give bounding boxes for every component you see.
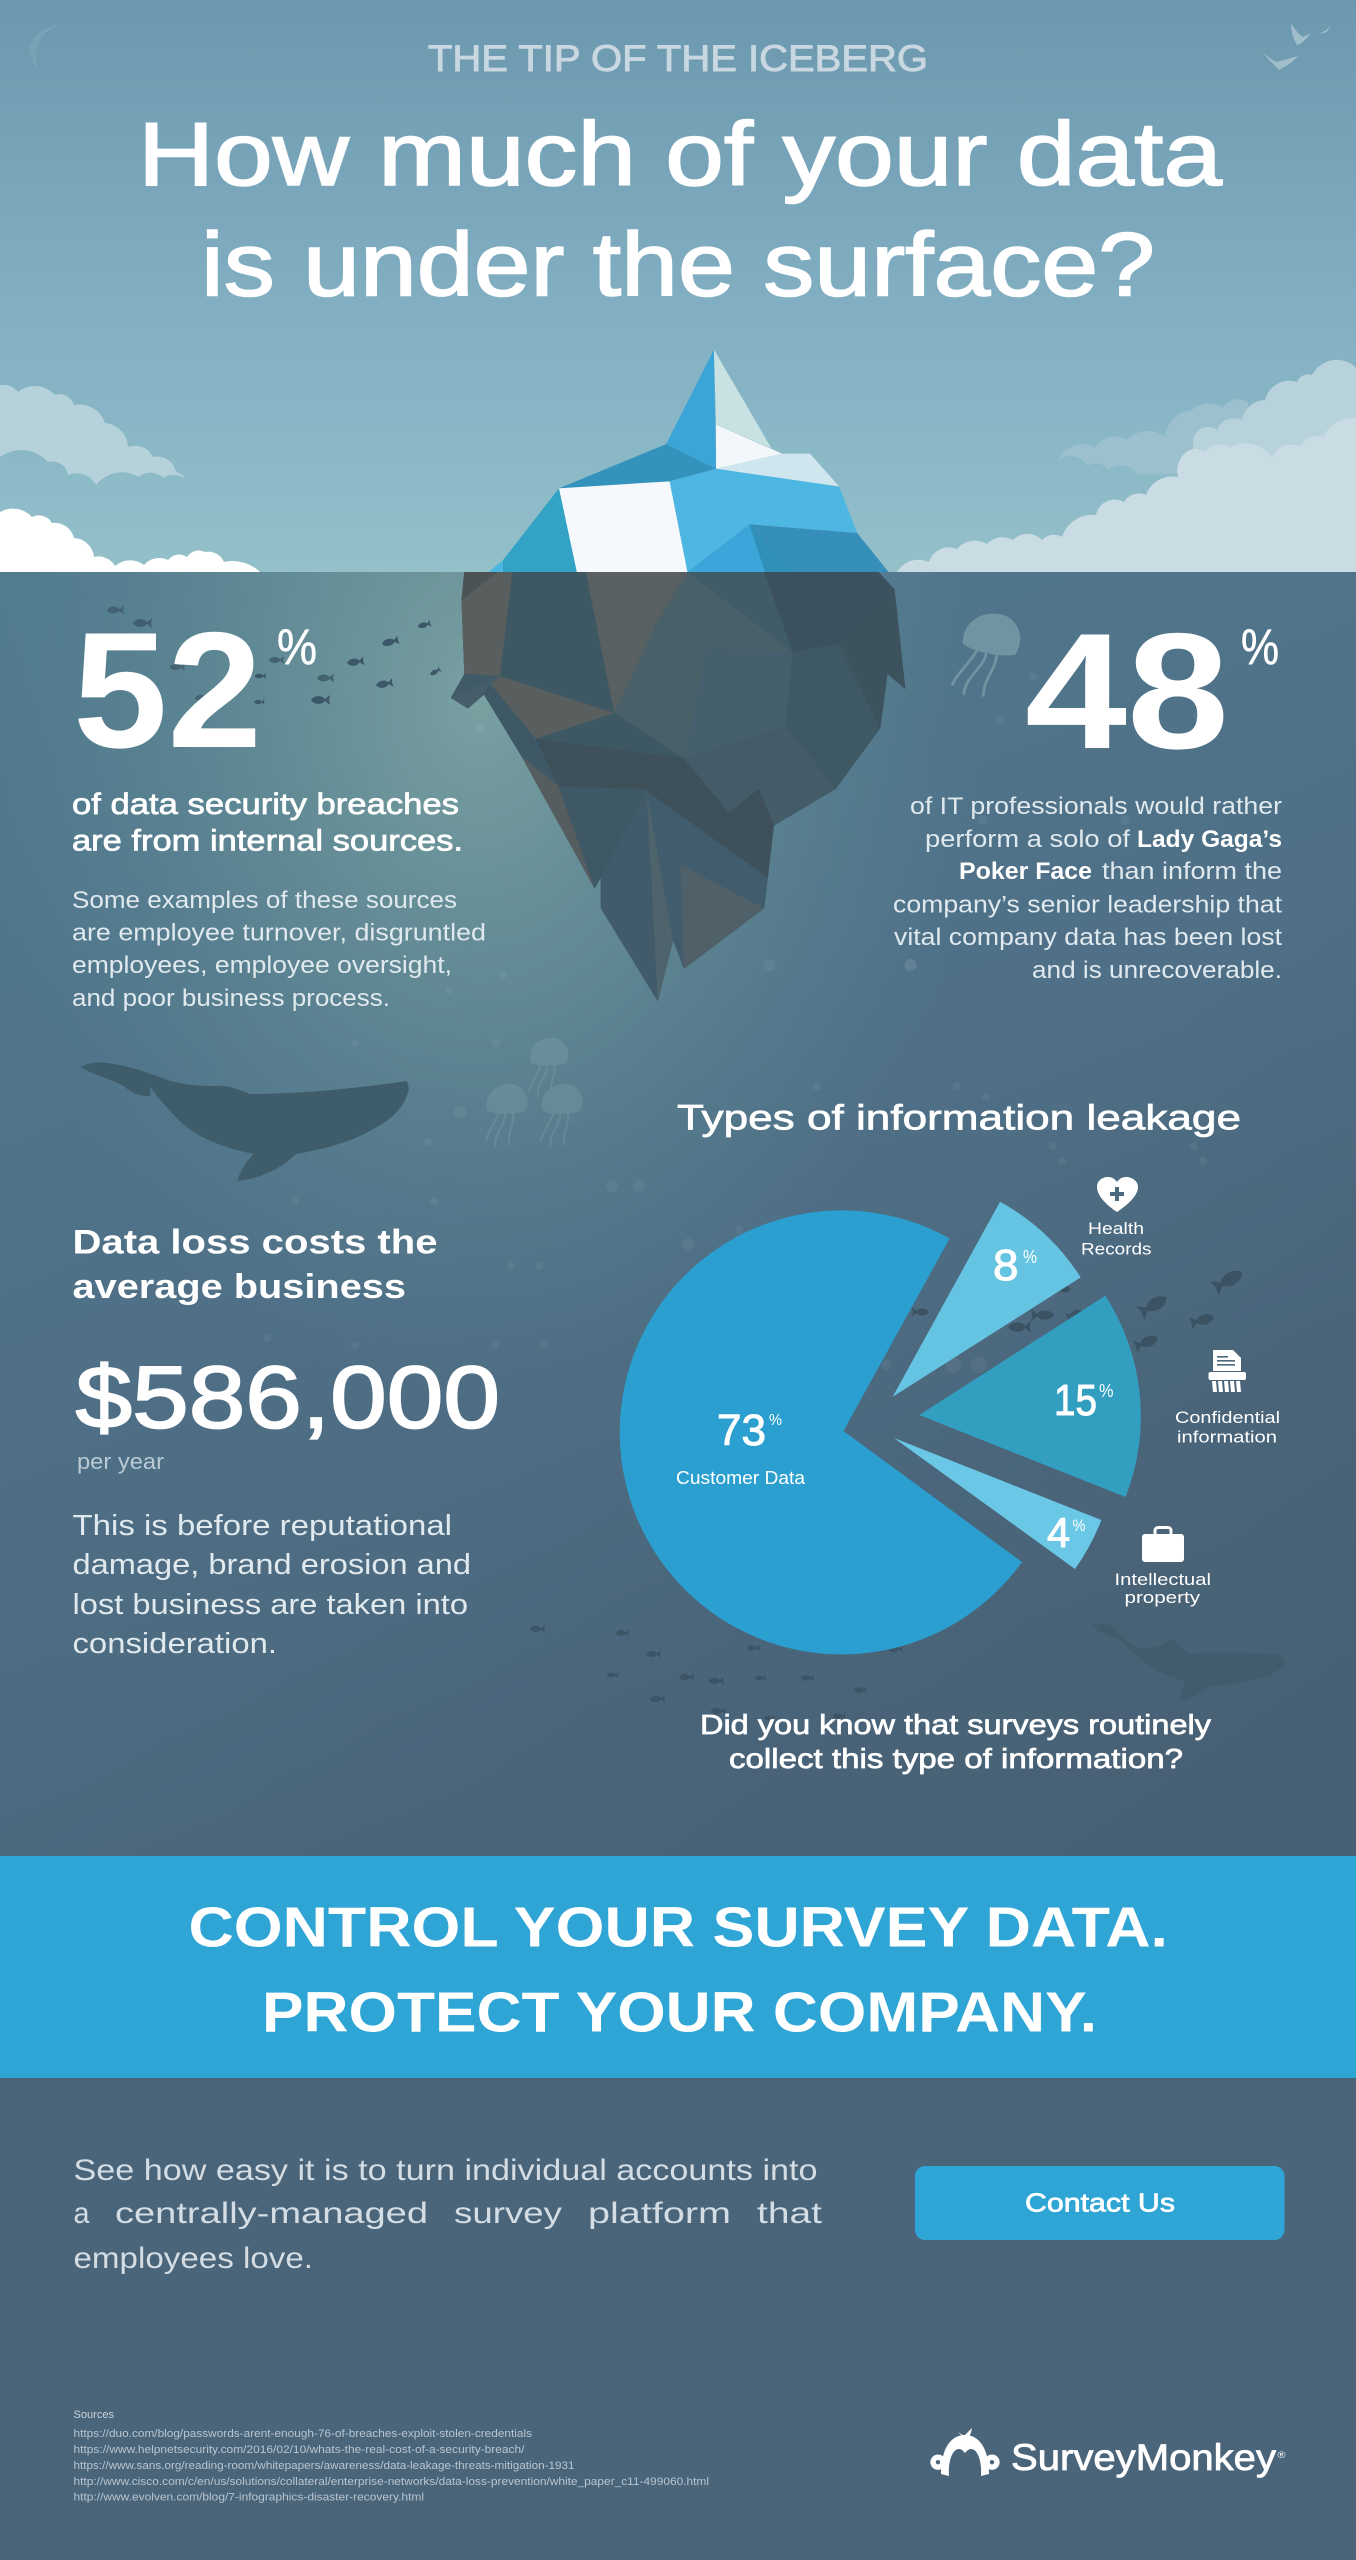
stat: 52 percent: 52: [73, 598, 262, 782]
body text: reputational damage: lost business are taken into: [72, 1589, 468, 1621]
sources list: Sources: [74, 2409, 114, 2421]
sources list: [74, 2409, 709, 2504]
whale left: [80, 1062, 409, 1181]
label: confidential information: Confidential: [1175, 1408, 1280, 1427]
slice: confidential information 15 percent: 15: [1054, 1376, 1097, 1425]
heading: data loss: average business: [72, 1268, 406, 1306]
footer body text: survey: [454, 2197, 562, 2230]
footer body text: a: [74, 2197, 90, 2230]
body text: sources examples: employees, employee oversight,: [72, 952, 452, 979]
bubbles: [263, 673, 1207, 1373]
footer body text: [74, 2154, 823, 2275]
slice: intellectual property 4 percent: [894, 1438, 1101, 1569]
slice: customer data 73 percent: Customer Data: [676, 1468, 806, 1488]
iceberg tip above water: [489, 350, 889, 572]
logo: SurveyMonkey: ®: [1278, 2450, 1286, 2460]
label: intellectual property: [1114, 1570, 1211, 1607]
footer body text: centrally-managed: [115, 2197, 428, 2230]
slice: health records 8 percent: %: [1023, 1247, 1037, 1267]
whale right: [1092, 1624, 1285, 1702]
label: health records: Records: [1081, 1240, 1152, 1258]
label: per year: per year: [77, 1449, 164, 1474]
icon: briefcase: [1142, 1528, 1184, 1562]
stat: 48 percent: %: [1241, 619, 1279, 675]
body text: Lady Gaga: vital company data has been lost: [894, 924, 1282, 951]
sources list: https://duo.com/blog/passwords-arent-enough-76-of-breaches-exploit-stolen-credentials: [74, 2428, 533, 2440]
main title: is under the surface?: [201, 216, 1155, 316]
background: sky: [0, 0, 1356, 572]
body text: reputational damage: [72, 1510, 471, 1660]
stat text: internal sources: of data security breaches: [72, 788, 459, 821]
body text: reputational damage: This is before reputational: [72, 1510, 452, 1542]
fish school behind pie chart: [912, 1265, 1247, 1353]
heading: types of information leakage: Types of information leakage: [677, 1098, 1241, 1138]
stat text: internal sources: are from internal sources.: [72, 824, 463, 858]
jellyfish right: [951, 608, 1024, 704]
body text: sources examples: Some examples of these sources: [72, 887, 457, 914]
slice: intellectual property 4 percent: %: [1072, 1516, 1086, 1535]
label: intellectual property: Intellectual: [1114, 1570, 1211, 1589]
body text: sources examples: are employee turnover, disgruntled: [72, 920, 486, 946]
jellyfish group centre-left: [486, 1038, 582, 1147]
label: health records: Health: [1088, 1219, 1144, 1238]
kicker heading: THE TIP OF THE ICEBERG: [428, 38, 928, 79]
callout question: [700, 1709, 1211, 1774]
body text: Lady Gaga: [893, 793, 1282, 984]
footer panel: [0, 2078, 1356, 2560]
icon: monkey head: [930, 2428, 1000, 2476]
call-to-action banner: PROTECT YOUR COMPANY.: [262, 1980, 1097, 2044]
body text: Lady Gaga: perform a solo of: [925, 826, 1130, 853]
slice: intellectual property 4 percent: 4: [1047, 1509, 1070, 1556]
footer body text: See how easy it is to turn individual accounts into: [74, 2154, 817, 2187]
label: confidential information: information: [1177, 1428, 1277, 1446]
slice: confidential information 15 percent: [919, 1296, 1141, 1497]
main title: [138, 105, 1223, 316]
body text: Lady Gaga: company’s senior leadership that: [893, 892, 1282, 918]
body text: sources examples: and poor business process.: [72, 985, 390, 1012]
body text: Lady Gaga: than inform the: [1102, 858, 1282, 885]
callout question: Did you know that surveys routinely: [700, 1709, 1211, 1740]
icon: shredder: [1208, 1350, 1246, 1392]
button: contact us: Contact Us: [1025, 2188, 1175, 2218]
body text: Lady Gaga: Poker Face: [959, 858, 1092, 885]
body text: Lady Gaga: of IT professionals would rather: [910, 793, 1282, 820]
footer body text: employees love.: [74, 2242, 313, 2275]
call-to-action banner: [0, 1856, 1356, 2078]
clouds left: [0, 385, 260, 572]
stat: 586,000: $586,000: [76, 1348, 500, 1446]
footer body text: that: [757, 2197, 823, 2230]
body text: Lady Gaga: and is unrecoverable.: [1032, 957, 1282, 984]
iceberg mass below water: [451, 572, 905, 1001]
stat: 52 percent: %: [277, 619, 317, 675]
sources list: http://www.evolven.com/blog/7-infographics-disaster-recovery.html: [74, 2492, 424, 2504]
clouds right: [897, 360, 1356, 572]
body text: Lady Gaga: Lady Gaga’s: [1137, 826, 1282, 853]
fish school top left: [107, 606, 442, 705]
iceberg: [451, 350, 905, 1001]
fish school below pie chart: [530, 1625, 903, 1721]
heading: data loss: [72, 1224, 437, 1306]
slice: health records 8 percent: 8: [993, 1241, 1018, 1290]
pie chart: [620, 1202, 1141, 1654]
background: underwater: [0, 572, 1356, 1856]
stat text: internal sources: [72, 788, 463, 858]
slice: customer data 73 percent: %: [769, 1412, 782, 1429]
icon: crescent moon: [30, 24, 62, 69]
body text: reputational damage: damage, brand erosion and: [72, 1549, 471, 1581]
sources list: https://www.sans.org/reading-room/whitepapers/awareness/data-leakage-threats-mitigation-1931: [74, 2460, 574, 2472]
callout question: collect this type of information?: [729, 1743, 1183, 1774]
icon: heart with cross: [1097, 1177, 1138, 1212]
label: confidential information: [1175, 1408, 1280, 1446]
slice: customer data 73 percent: 73: [717, 1406, 766, 1455]
slice: confidential information 15 percent: %: [1099, 1381, 1114, 1401]
slice: customer data 73 percent: [620, 1210, 1022, 1654]
main title: How much of your data: [138, 105, 1223, 205]
stat: 48 percent: 48: [1025, 599, 1229, 783]
logo: SurveyMonkey: SurveyMonkey: [1011, 2437, 1277, 2478]
body text: sources examples: [72, 887, 486, 1012]
body text: reputational damage: consideration.: [72, 1628, 277, 1660]
icon: birds: [1263, 22, 1332, 70]
button: contact us: [915, 2166, 1284, 2240]
label: health records: [1081, 1219, 1152, 1258]
label: intellectual property: property: [1124, 1588, 1201, 1607]
logo: SurveyMonkey: [930, 2428, 1286, 2478]
slice: health records 8 percent: [893, 1202, 1081, 1397]
heading: data loss: Data loss costs the: [72, 1224, 437, 1262]
call-to-action banner: CONTROL YOUR SURVEY DATA.: [188, 1896, 1168, 1960]
sources list: https://www.helpnetsecurity.com/2016/02/10/whats-the-real-cost-of-a-security-breach/: [74, 2444, 526, 2456]
footer body text: platform: [588, 2197, 731, 2230]
sources list: http://www.cisco.com/c/en/us/solutions/collateral/enterprise-networks/data-loss-prevention/white_paper_c11-499060.html: [74, 2476, 709, 2488]
